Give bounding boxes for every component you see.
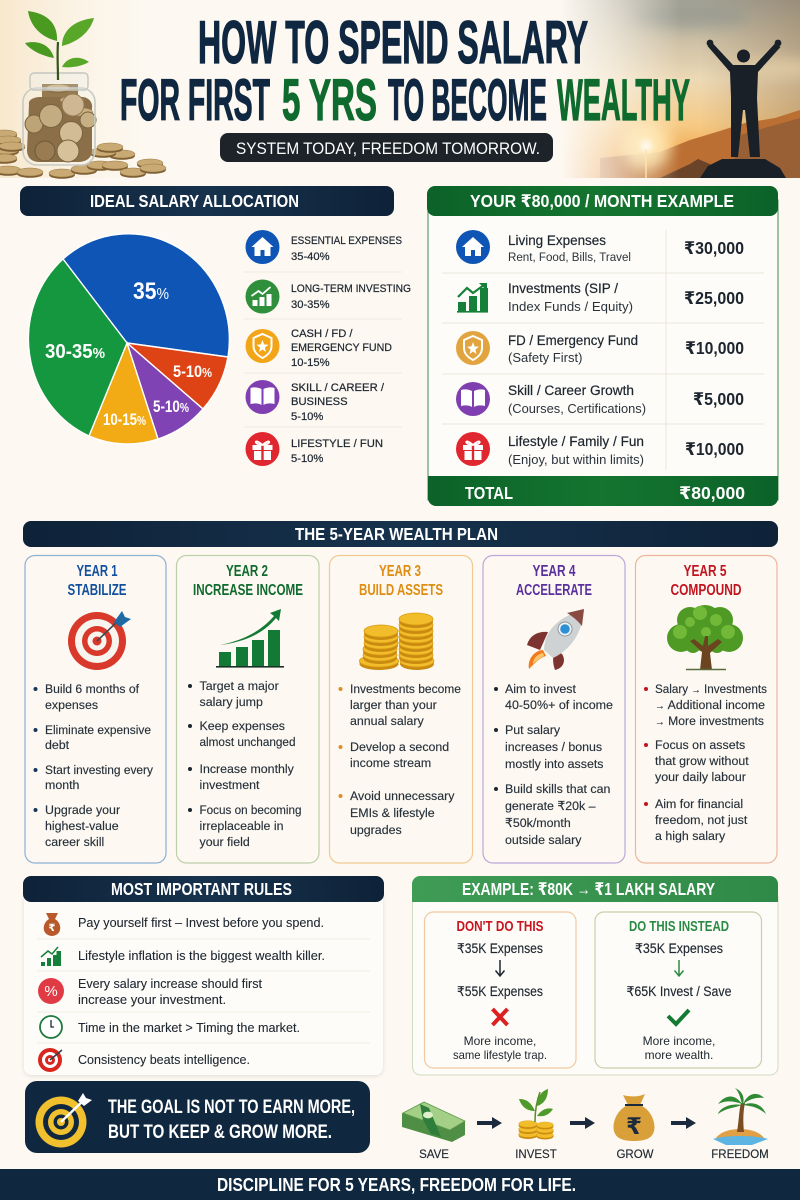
heading: IDEAL SALARY ALLOCATION: [90, 191, 299, 211]
panel: year 3: [330, 556, 472, 863]
bullet list: almost unchanged: [200, 735, 296, 749]
step: grow: ₹: [626, 1113, 642, 1139]
legend: long-term investing: [246, 280, 411, 314]
panel: year 5: COMPOUND: [670, 582, 742, 599]
arrow: [671, 1117, 696, 1129]
pie chart: 5-10%: [153, 397, 189, 416]
do this instead box: DO THIS INSTEAD: [629, 918, 729, 935]
do this instead box: [595, 912, 762, 1068]
row: skill career growth: ₹5,000: [693, 389, 744, 409]
bullet list: a high salary: [655, 829, 726, 843]
arrow: [570, 1117, 595, 1129]
bullet list: Target a major: [200, 679, 279, 693]
row: investments: Investments (SIP /: [508, 281, 618, 296]
step: invest: INVEST: [515, 1149, 557, 1161]
man with raised arms on rock: [700, 40, 786, 178]
icon: coin stacks: [359, 613, 434, 670]
panel: year 2: YEAR 2: [226, 563, 268, 580]
legend: essential expenses: 35-40%: [291, 251, 330, 263]
bullet list: → More investments: [655, 714, 764, 728]
bullet list: Investments become: [350, 682, 461, 696]
bullet list: [494, 682, 613, 847]
rule 3: Every salary increase should first: [78, 976, 262, 991]
title line 2: [120, 68, 690, 133]
legend: essential expenses: ESSENTIAL EXPENSES: [291, 235, 402, 247]
tagline pill: [220, 133, 553, 162]
panel: example 80k to 1 lakh: [412, 876, 778, 1075]
bullet list: career skill: [45, 835, 104, 849]
panel: year 2: [176, 556, 319, 863]
row: fd emergency fund: (Safety First): [508, 350, 582, 365]
bullet list: Start investing every: [45, 763, 154, 777]
rule 1: Pay yourself first – Invest before you spend.: [78, 915, 324, 930]
icon: tree: [667, 605, 743, 670]
bullet list: Aim for financial: [655, 797, 743, 811]
bullet list: Eliminate expensive: [45, 723, 151, 737]
don't do this box: ₹35K Expenses: [457, 941, 543, 956]
icon: rocket: [527, 609, 584, 670]
do this instead box: More income,: [643, 1034, 715, 1048]
bullet list: increases / bonus: [505, 740, 602, 754]
panel: year 5: [636, 556, 777, 863]
row: skill career growth: (Courses, Certifications): [508, 401, 646, 416]
do this instead box: ₹65K Invest / Save: [626, 984, 732, 999]
legend: skill career business: BUSINESS: [291, 396, 348, 408]
bullet list: Focus on becoming: [200, 803, 302, 817]
section heading: 5-year wealth plan: [23, 521, 778, 547]
rule 4: Time in the market > Timing the market.: [78, 1020, 300, 1035]
panel: year 3: YEAR 3: [379, 563, 421, 580]
bullet list: 40-50%+ of income: [505, 698, 613, 712]
rule 3: increase your investment.: [78, 992, 226, 1007]
panel: year 3: BUILD ASSETS: [359, 582, 443, 599]
pie chart: 35%: [133, 278, 169, 305]
icon: target with arrow: [68, 611, 131, 670]
row: fd emergency fund: ₹10,000: [685, 338, 744, 358]
row: fd emergency fund: [456, 331, 744, 365]
bullet list: upgrades: [350, 823, 402, 837]
coin pile: [0, 130, 166, 179]
panel: 80000 month example: [427, 186, 778, 506]
panel: year 2: INCREASE INCOME: [193, 582, 303, 599]
row: skill career growth: Skill / Career Growth: [508, 383, 634, 398]
heading: [412, 876, 778, 902]
don't do this box: [424, 912, 576, 1068]
pie chart: [28, 234, 229, 444]
rule 4: [40, 1016, 300, 1038]
step: save: SAVE: [419, 1149, 449, 1161]
don't do this box: More income,: [464, 1034, 536, 1048]
bullet list: investment: [200, 778, 260, 792]
glass jar with coins: [23, 73, 96, 165]
tagline pill: SYSTEM TODAY, FREEDOM TOMORROW.: [236, 139, 540, 158]
bullet list: Aim to invest: [505, 682, 576, 696]
panel: year 1: [25, 556, 166, 863]
legend: cash fd emergency fund: 10-15%: [291, 357, 330, 369]
step: invest: [515, 1089, 557, 1161]
don't do this box: ₹55K Expenses: [457, 984, 543, 999]
bullet list: [338, 682, 461, 837]
icon: gold target: [36, 1093, 92, 1148]
row: fd emergency fund: FD / Emergency Fund: [508, 333, 638, 348]
row: investments: Index Funds / Equity): [508, 299, 633, 314]
row: living expenses: [456, 230, 744, 264]
panel: most important rules: [23, 876, 384, 1075]
bullet list: EMIs & lifestyle: [350, 806, 435, 820]
legend: cash fd emergency fund: [246, 328, 392, 369]
bullet list: [644, 682, 767, 843]
header banner: [0, 0, 800, 179]
legend: skill career business: SKILL / CAREER /: [291, 382, 385, 394]
total row: ₹80,000: [679, 483, 745, 503]
panel: year 4: ACCELERATE: [516, 582, 592, 599]
bullet list: Put salary: [505, 723, 561, 737]
footer bar: DISCIPLINE FOR 5 YEARS, FREEDOM FOR LIFE.: [217, 1175, 576, 1195]
panel: year 1: YEAR 1: [76, 563, 118, 580]
legend: lifestyle fun: [246, 432, 383, 466]
panel: year 4: [483, 556, 625, 863]
row: living expenses: Living Expenses: [508, 233, 606, 248]
flow: save invest grow freedom: [402, 1088, 769, 1161]
legend: cash fd emergency fund: EMERGENCY FUND: [291, 342, 392, 354]
do this instead box: ₹35K Expenses: [635, 941, 723, 956]
step: freedom: FREEDOM: [711, 1149, 769, 1161]
heading: [20, 186, 394, 216]
step: save: [402, 1102, 465, 1161]
legend: cash fd emergency fund: CASH / FD /: [291, 328, 353, 340]
legend: essential expenses: [246, 230, 402, 264]
pie chart: 10-15%: [103, 410, 146, 429]
banner: the goal: [25, 1081, 370, 1153]
title line 2: 5 YRS: [282, 68, 377, 133]
rule 3: [38, 976, 262, 1007]
bullet list: generate ₹20k –: [505, 799, 596, 813]
pie chart: 5-10%: [173, 362, 212, 381]
heading: MOST IMPORTANT RULES: [111, 879, 292, 899]
do this instead box: more wealth.: [645, 1048, 713, 1062]
sunset photo: sky, sun, mountains: [560, 0, 800, 178]
legend: long-term investing: 30-35%: [291, 299, 330, 311]
legend: lifestyle fun: LIFESTYLE / FUN: [291, 438, 383, 450]
bullet list: your field: [200, 835, 250, 849]
rule 1: ₹: [49, 923, 56, 934]
row: investments: [457, 281, 744, 314]
bullet list: mostly into assets: [505, 757, 603, 771]
bullet list: Keep expenses: [200, 719, 285, 733]
bullet list: Avoid unnecessary: [350, 789, 455, 803]
bullet list: your daily labour: [655, 770, 746, 784]
legend: [246, 230, 411, 466]
arrow: [477, 1117, 502, 1129]
bullet list: month: [45, 778, 80, 792]
bullet list: outside salary: [505, 833, 582, 847]
row: living expenses: ₹30,000: [684, 238, 744, 258]
footer bar: [0, 1169, 800, 1200]
bullet list: highest-value: [45, 819, 119, 833]
banner: the goal: BUT TO KEEP & GROW MORE.: [108, 1122, 332, 1143]
rule 5: Consistency beats intelligence.: [78, 1052, 250, 1067]
don't do this box: DON'T DO THIS: [456, 918, 544, 935]
bullet list: irreplaceable in: [200, 819, 284, 833]
legend: lifestyle fun: 5-10%: [291, 453, 323, 465]
bullet list: Develop a second: [350, 740, 449, 754]
don't do this box: same lifestyle trap.: [453, 1048, 547, 1062]
total row: TOTAL: [465, 483, 513, 503]
banner: the goal: THE GOAL IS NOT TO EARN MORE,: [108, 1097, 355, 1118]
bullet list: Upgrade your: [45, 803, 120, 817]
pie chart: 30-35%: [45, 341, 105, 363]
row: living expenses: Rent, Food, Bills, Travel: [508, 250, 631, 264]
bullet list: Increase monthly: [200, 762, 295, 776]
bullet list: debt: [45, 738, 70, 752]
bullet list: [34, 682, 154, 849]
title line 2: TO BECOME: [388, 68, 547, 133]
legend: skill career business: [246, 380, 385, 423]
row: lifestyle family fun: ₹10,000: [685, 439, 744, 459]
rule 3: %: [44, 983, 58, 1000]
plant sprout: [25, 11, 94, 80]
bullet list: Build skills that can: [505, 782, 610, 796]
row: lifestyle family fun: Lifestyle / Family / Fun: [508, 434, 644, 449]
bullet list: Focus on assets: [655, 738, 745, 752]
panel: year 5: YEAR 5: [684, 563, 727, 580]
heading: [427, 186, 778, 216]
bullet list: salary jump: [200, 695, 263, 709]
left warm glow: [0, 0, 190, 178]
legend: long-term investing: LONG-TERM INVESTING: [291, 283, 411, 295]
row: lifestyle family fun: (Enjoy, but within limits): [508, 452, 644, 467]
step: grow: [614, 1094, 654, 1161]
row: investments: ₹25,000: [684, 288, 744, 308]
heading: YOUR ₹80,000 / MONTH EXAMPLE: [470, 191, 734, 211]
icon: rising bar chart: [216, 609, 284, 668]
total row: [428, 476, 778, 506]
row: skill career growth: [456, 382, 744, 416]
row: lifestyle family fun: [456, 432, 744, 467]
panel: year 1: STABILIZE: [68, 582, 127, 599]
heading: EXAMPLE: ₹80K → ₹1 LAKH SALARY: [462, 879, 715, 899]
rule 2: Lifestyle inflation is the biggest wealth killer.: [78, 948, 325, 963]
bullet list: annual salary: [350, 714, 425, 728]
bullet list: Salary → Investments: [655, 682, 767, 696]
section heading: 5-year wealth plan: THE 5-YEAR WEALTH PLAN: [295, 524, 498, 544]
rule 5: [38, 1048, 250, 1072]
bullet list: freedom, not just: [655, 813, 748, 827]
step: grow: GROW: [616, 1149, 654, 1161]
rule 2: [41, 947, 325, 966]
panel: year 4: YEAR 4: [532, 563, 576, 580]
bullet list: larger than your: [350, 698, 437, 712]
bullet list: ₹50k/month: [505, 816, 571, 830]
bullet list: [188, 679, 302, 849]
legend: skill career business: 5-10%: [291, 411, 323, 423]
title line 2: FOR FIRST: [120, 68, 270, 133]
bullet list: income stream: [350, 756, 431, 770]
bullet list: that grow without: [655, 754, 749, 768]
heading: [23, 876, 384, 902]
bullet list: expenses: [45, 698, 98, 712]
panel: ideal salary allocation: [20, 186, 411, 466]
rule 1: [44, 913, 324, 936]
bullet list: Build 6 months of: [45, 682, 140, 696]
step: freedom: [711, 1088, 769, 1161]
bullet list: → Additional income: [655, 698, 765, 712]
